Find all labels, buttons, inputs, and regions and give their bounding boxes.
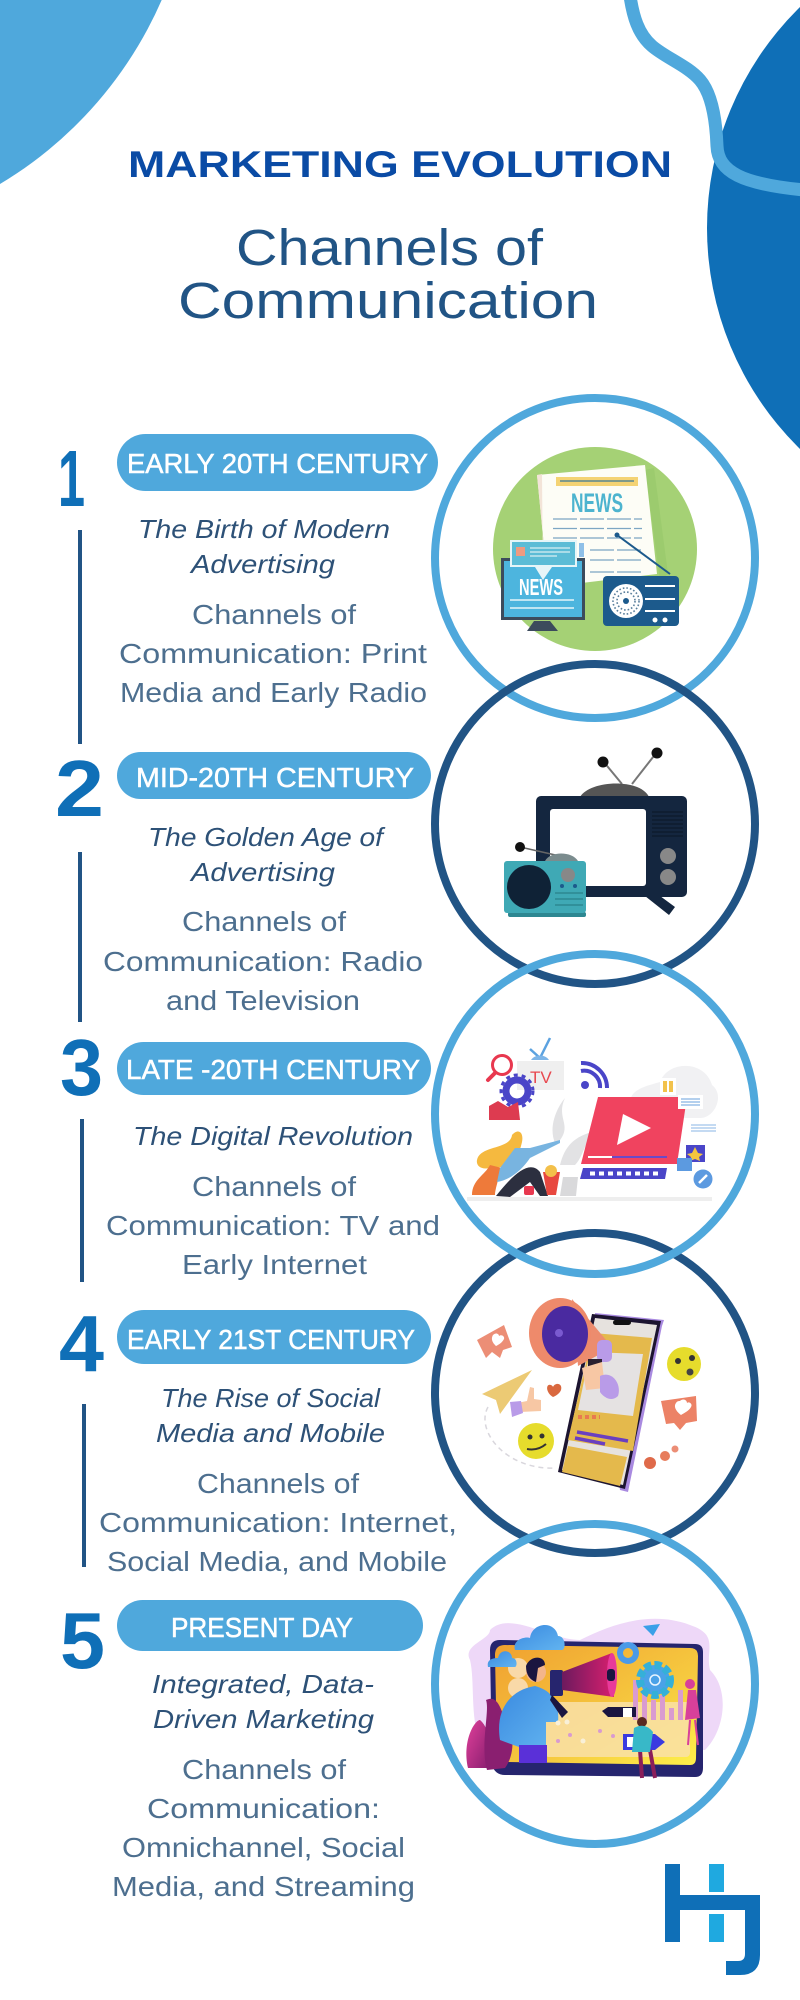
number 5: 5: [60, 1596, 105, 1685]
tagline 4: The Rise of Social: [161, 1383, 381, 1413]
circle ring 3: [435, 954, 755, 1274]
description 4: Channels of: [197, 1468, 359, 1499]
tagline 5: [152, 1669, 375, 1734]
description 5: Communication:: [147, 1793, 380, 1824]
tagline 1: The Birth of Modern: [138, 514, 390, 544]
step 5: [60, 1596, 423, 1902]
step 2: [55, 744, 431, 1022]
description 2: and Television: [166, 985, 360, 1016]
tagline 5: Integrated, Data-: [152, 1669, 374, 1699]
tagline 4: Media and Mobile: [156, 1418, 385, 1448]
circle ring 1: [435, 398, 755, 718]
description 1: Media and Early Radio: [120, 677, 427, 708]
description 5: Channels of: [182, 1754, 346, 1785]
pill: present day: PRESENT DAY: [171, 1612, 353, 1643]
description 3: Early Internet: [182, 1249, 367, 1280]
background shape: squiggle line: [630, 0, 800, 190]
pill: early 21st century: EARLY 21ST CENTURY: [127, 1324, 415, 1355]
number 1: 1: [58, 434, 85, 523]
description 5: Media, and Streaming: [112, 1871, 415, 1902]
pill: early 21st century: [117, 1310, 431, 1364]
description 1: [119, 599, 427, 708]
description 3: Communication: TV and: [106, 1210, 440, 1241]
icon: news and radio: [493, 447, 697, 651]
number 3: 3: [60, 1023, 103, 1112]
description 5: [112, 1754, 415, 1902]
timeline line 1: [78, 530, 82, 744]
background shape: right circle: [707, 0, 800, 537]
tagline 5: Driven Marketing: [153, 1704, 375, 1734]
number 2: 2: [55, 744, 104, 833]
circle ring 2: [435, 664, 755, 984]
logo: HJ monogram: [665, 1864, 760, 1975]
description 5: Omnichannel, Social: [122, 1832, 405, 1863]
icon: news and radio: NEWS: [571, 488, 623, 518]
icon: television and radio: [504, 748, 687, 917]
subtitle: [178, 219, 598, 329]
description 4: Social Media, and Mobile: [107, 1546, 447, 1577]
description 3: Channels of: [192, 1171, 356, 1202]
description 1: Communication: Print: [119, 638, 427, 669]
pill: early 20th century: EARLY 20TH CENTURY: [127, 448, 428, 479]
tagline 2: The Golden Age of: [148, 822, 386, 852]
icon: digital media: [467, 1038, 718, 1201]
description 2: Communication: Radio: [103, 946, 423, 977]
icon: digital media: TV: [530, 1068, 552, 1087]
description 1: Channels of: [192, 599, 356, 630]
tagline 2: [148, 822, 386, 887]
tagline 1: Advertising: [189, 549, 336, 579]
tagline 1: [138, 514, 390, 579]
timeline line 2: [78, 852, 82, 1022]
step 3: [60, 1023, 440, 1282]
pill: mid-20th century: [117, 752, 431, 799]
description 3: [106, 1171, 440, 1280]
pill: mid-20th century: MID-20TH CENTURY: [136, 762, 414, 793]
icon: news and radio: NEWS: [519, 574, 563, 600]
tagline 3: The Digital Revolution: [133, 1121, 413, 1151]
tagline 2: Advertising: [189, 857, 336, 887]
icon: social media phone: [477, 1298, 701, 1492]
icon: integrated marketing screen: [466, 1619, 723, 1778]
circle ring 5: [435, 1524, 755, 1844]
number 4: 4: [59, 1299, 105, 1388]
subtitle: Channels of: [236, 219, 544, 276]
description 4: Communication: Internet,: [99, 1507, 457, 1538]
pill: early 20th century: [117, 434, 438, 491]
tagline 4: [156, 1383, 385, 1448]
step 1: [58, 434, 438, 744]
description 2: Channels of: [182, 906, 346, 937]
circle ring 4: [435, 1233, 755, 1553]
subtitle: Communication: [178, 272, 598, 329]
pill: late 20th century: [117, 1042, 431, 1095]
pill: late 20th century: LATE -20TH CENTURY: [126, 1054, 420, 1085]
description 4: [99, 1468, 457, 1577]
description 2: [103, 906, 423, 1016]
timeline line 4: [82, 1404, 86, 1567]
timeline line 3: [80, 1119, 84, 1282]
step 4: [59, 1299, 457, 1577]
background shape: top-left circle: [0, 0, 195, 241]
title: MARKETING EVOLUTION: [128, 144, 672, 185]
pill: present day: [117, 1600, 423, 1651]
